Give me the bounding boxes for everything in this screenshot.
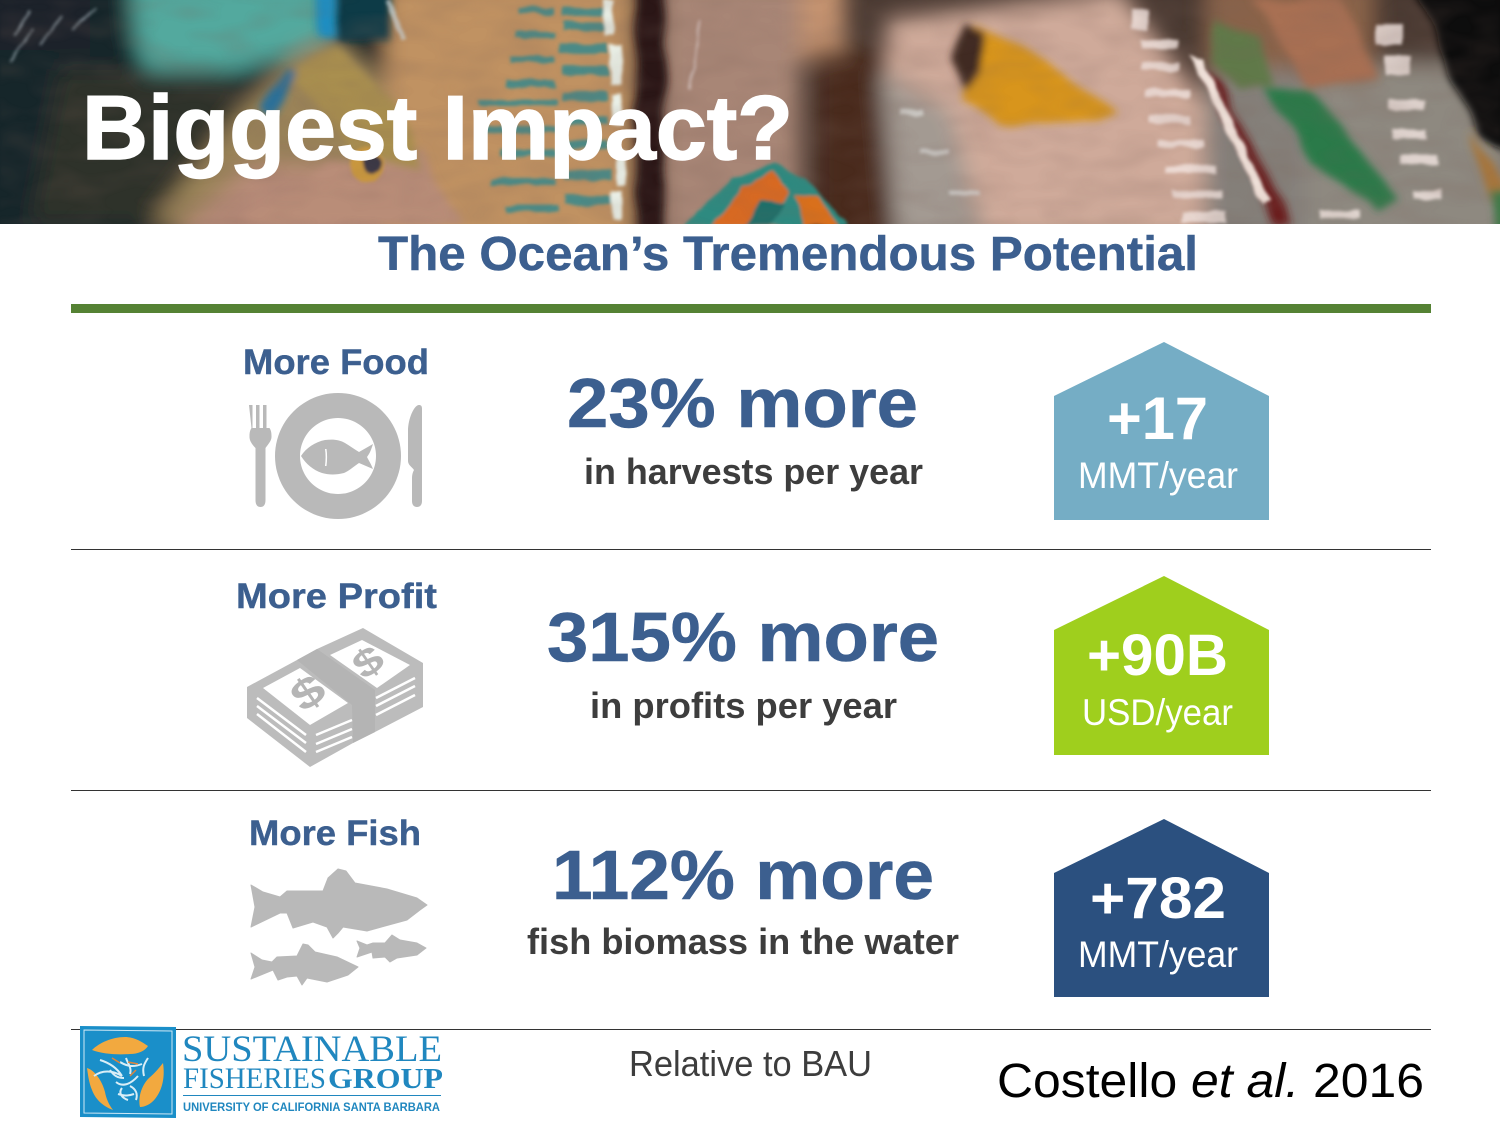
logo: Sustainable Fisheries Group: UNIVERSITY OF CALIFORNIA SANTA BARBARA <box>183 1102 440 1114</box>
icon: plate with fish, fork and knife <box>249 393 422 519</box>
dollar signs: $ <box>281 664 334 721</box>
eye <box>350 148 384 182</box>
green heading rule <box>71 304 1431 313</box>
citation: Costello et al. 2016 <box>997 1055 1424 1108</box>
stat: 112% more <box>527 836 959 962</box>
description: biomass: fish biomass in the water <box>527 921 959 962</box>
title: Biggest Impact? <box>82 78 793 179</box>
logo: Sustainable Fisheries Group: FISHERIES <box>183 1062 326 1095</box>
row: more food <box>243 343 429 519</box>
stat: 315% more <box>547 598 939 726</box>
badge: +17 MMT/year: +17 <box>1107 385 1208 452</box>
row: more fish <box>249 814 427 985</box>
row: more profit <box>236 577 437 767</box>
stat: 315% more: 315% more <box>547 598 939 676</box>
scale highlights <box>1132 8 1442 222</box>
badge: +90B USD/year <box>1054 576 1269 755</box>
subtitle: The Ocean’s Tremendous Potential <box>378 228 1198 281</box>
badge: +90B USD/year: +90B <box>1087 623 1228 688</box>
badge: +782 MMT/year: +782 <box>1090 866 1226 931</box>
patterned fish fragment <box>684 163 848 226</box>
stripes on the orange fish <box>478 8 615 212</box>
badge: +17 MMT/year: MMT/year <box>1078 455 1238 496</box>
logo: Sustainable Fisheries Group: GROUP <box>328 1063 443 1095</box>
badge: +782 MMT/year <box>1054 819 1269 997</box>
badge: +90B USD/year: USD/year <box>1082 692 1233 733</box>
label: more profit: More Profit <box>236 577 437 616</box>
logo wordmark: SUSTAINABLE <box>182 1029 442 1070</box>
stat: 23% more: 23% more <box>567 364 918 442</box>
logo emblem <box>80 1026 176 1118</box>
logo: Sustainable Fisheries Group <box>80 1026 443 1118</box>
note: relative to BAU: Relative to BAU <box>629 1043 872 1084</box>
badge: +17 MMT/year <box>1054 342 1269 520</box>
icon: stack of banknotes <box>247 628 423 767</box>
stat: 23% more <box>567 364 923 492</box>
icon: three fish silhouettes <box>251 869 427 985</box>
stat: 112% more: 112% more <box>552 836 934 914</box>
badge: +782 MMT/year: MMT/year <box>1078 934 1238 975</box>
description: harvests: in harvests per year <box>584 451 923 492</box>
label: more fish: More Fish <box>249 814 421 853</box>
icon: stack of banknotes: $ <box>344 636 392 688</box>
silver edge of orange fish <box>604 0 626 220</box>
label: more food: More Food <box>243 343 429 382</box>
header photo: parrotfish close-up <box>0 0 1500 270</box>
description: profits: in profits per year <box>590 685 897 726</box>
